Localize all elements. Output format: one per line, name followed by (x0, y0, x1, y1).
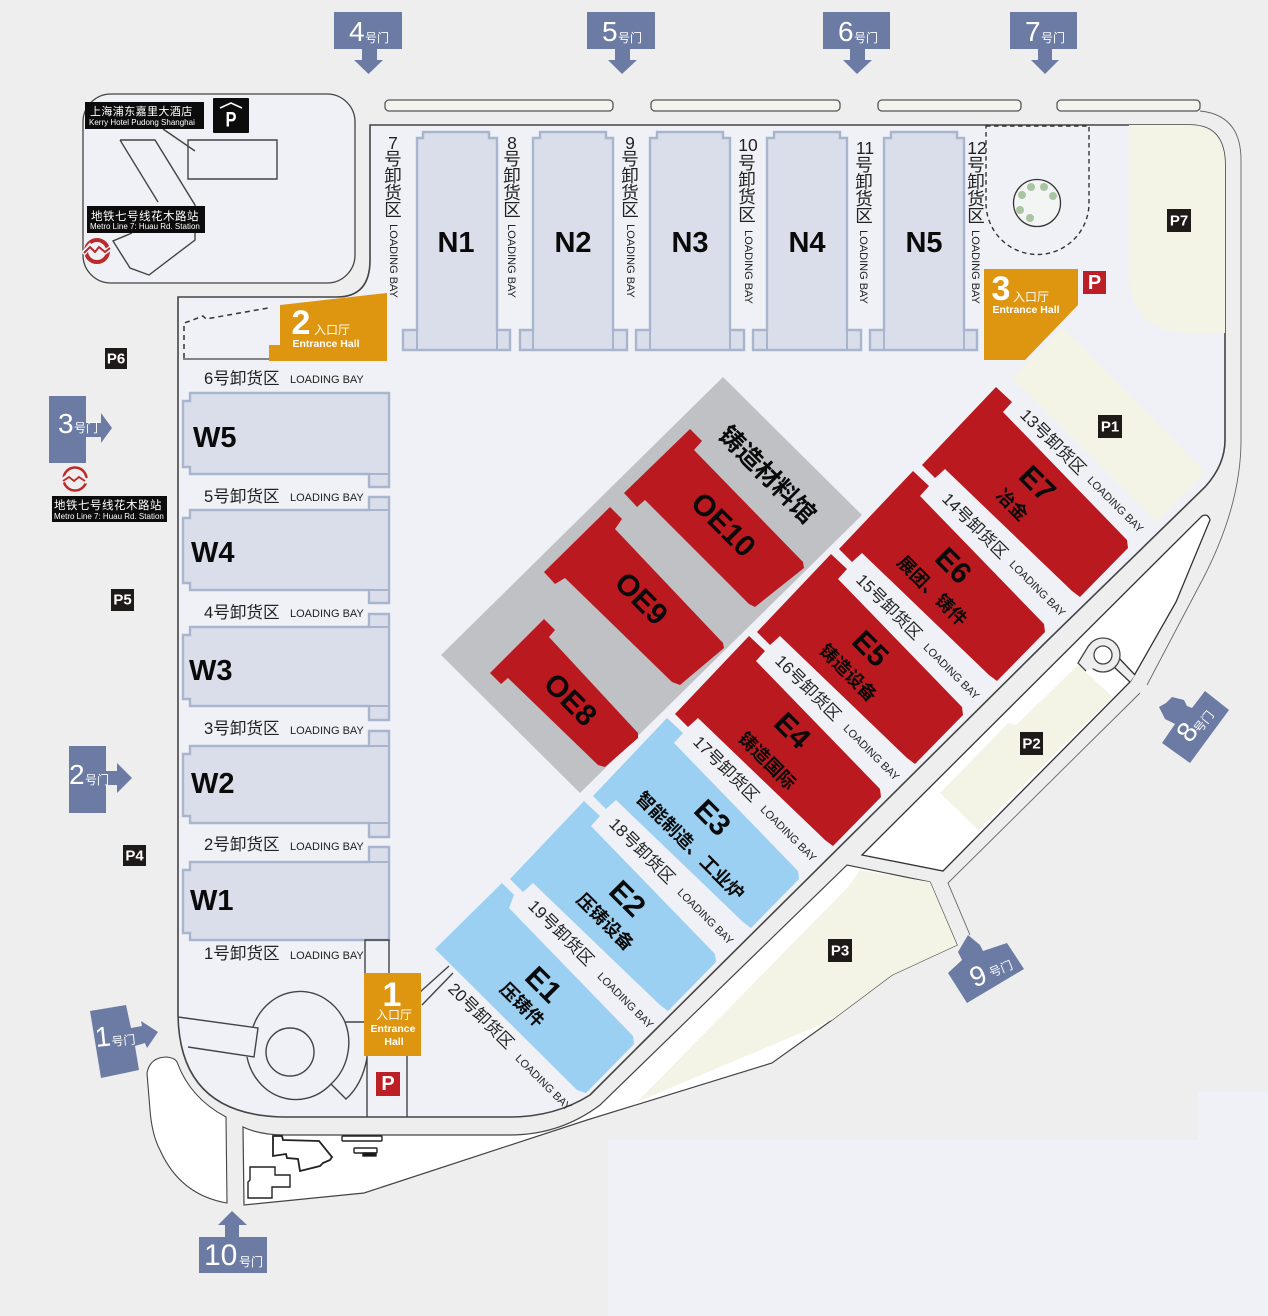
north loading bay labels: 卸 (621, 166, 639, 186)
gate 9: 号门 (987, 957, 1015, 980)
north loading bay labels: 10 (738, 135, 758, 155)
label: metro station: 地铁七号线花木路站 (91, 209, 199, 223)
gate 3: 号门 (74, 420, 98, 435)
gate 10 (199, 1211, 267, 1273)
east hall E7: LOADING BAY (1085, 475, 1146, 536)
label E1: 压铸件 (496, 979, 548, 1031)
north loading bay labels: 区 (855, 206, 873, 226)
label E5: LOADING BAY (921, 642, 982, 703)
north loading bay labels: LOADING BAY (742, 230, 754, 305)
entrance hall 1 (364, 973, 421, 1056)
metro station west (52, 468, 167, 522)
gate 8: 8 (1170, 716, 1204, 748)
panel: main exhibition site (178, 125, 1225, 1117)
north loading bay labels: 11 (856, 138, 874, 158)
hall N5 (870, 132, 977, 350)
gate 4: 号门 (365, 30, 389, 45)
north loading bay labels: 号 (384, 149, 402, 169)
east hall E7 (922, 387, 1146, 597)
hall OE8 (490, 619, 638, 767)
hall N1 (403, 132, 510, 350)
buildings (248, 1136, 382, 1198)
label E1: 19号卸货区 (524, 896, 598, 970)
gate 7 (1010, 12, 1077, 74)
west loading bay labels: LOADING BAY (290, 725, 364, 737)
hall OE9 (544, 507, 724, 685)
icon: parking (213, 98, 249, 133)
label: metro station: Metro Line 7: Huau Rd. Station (54, 512, 164, 521)
east hall E7: E7 (1012, 459, 1062, 509)
north loading bay labels: 区 (503, 200, 521, 220)
north loading bay labels: LOADING BAY (387, 224, 399, 299)
label E3: 17号卸货区 (689, 732, 763, 806)
label: metro station: 地铁七号线花木路站 (54, 498, 162, 512)
hall N1: N1 (437, 227, 475, 259)
parking tags (105, 209, 1191, 962)
hall OE8: OE8 (537, 667, 603, 733)
east hall E4 (675, 636, 881, 846)
north loading bay labels: 区 (621, 200, 639, 220)
east hall E3 (593, 718, 799, 928)
east hall E5 (757, 554, 963, 764)
label E4 (734, 651, 902, 794)
entrance hall 3: 3 (992, 270, 1010, 308)
label E1: LOADING BAY (513, 1053, 574, 1114)
north loading bay labels: 号 (855, 155, 873, 175)
hall N4: N4 (788, 227, 826, 259)
gate 6: 号门 (854, 30, 878, 45)
label: metro station: Metro Line 7: Huau Rd. Station (90, 222, 200, 231)
panel: foundry materials hall (441, 377, 862, 793)
hall W1: W1 (190, 885, 234, 917)
north loading bay labels: LOADING BAY (969, 230, 981, 305)
east hall E6 (839, 471, 1045, 681)
parking tags: P7 (1170, 212, 1188, 230)
label E3: LOADING BAY (758, 804, 819, 865)
gate 6 (823, 12, 890, 74)
label E5: E5 (845, 624, 895, 674)
gate 8 (1159, 691, 1229, 763)
label: Kerry Hotel: 上海浦东嘉里大酒店 (90, 104, 193, 118)
hall N2: N2 (554, 227, 592, 259)
west loading bay labels: 1号卸货区 (204, 944, 280, 963)
west loading bay labels: LOADING BAY (290, 492, 364, 504)
label E2: 压铸设备 (572, 889, 638, 955)
label E3: 智能制造、工业炉 (632, 787, 749, 904)
gate 5: 5 (602, 16, 618, 47)
north loading bay labels: 区 (967, 206, 985, 226)
entrance hall 2 (269, 293, 387, 361)
label E6: 14号卸货区 (938, 489, 1012, 563)
gate 1: 号门 (111, 1032, 136, 1049)
entrance hall 3 (984, 269, 1078, 360)
entrance hall 1: 1 (383, 976, 401, 1014)
hall N4 (753, 132, 861, 350)
north loading bay labels: 卸 (967, 172, 985, 192)
hall N3 (636, 132, 744, 350)
gate 5: 号门 (618, 30, 642, 45)
west loading bay labels: 2号卸货区 (204, 835, 280, 854)
label E4: E4 (767, 706, 817, 756)
label E5: 铸造设备 (815, 640, 881, 706)
hall N3: N3 (671, 227, 709, 259)
label E1: 20号卸货区 (444, 979, 518, 1053)
gate 7: 7 (1025, 16, 1041, 47)
west halls (183, 393, 389, 940)
hall W3: W3 (189, 655, 232, 687)
gate 1 (90, 1005, 158, 1078)
gate 2 (69, 746, 132, 813)
gate 2: 2 (69, 759, 85, 790)
dashed boundary near entrance 2 (184, 308, 268, 358)
east hall E7: 13号卸货区 (1016, 405, 1090, 479)
hall N5: N5 (905, 227, 943, 259)
label E3: E3 (687, 793, 737, 843)
north loading bay labels: 货 (621, 183, 639, 203)
label: metro station (87, 206, 205, 233)
gate 3 (49, 396, 112, 463)
garden roundabout (986, 126, 1089, 254)
north loading bay labels: 卸 (855, 172, 873, 192)
north loading bay labels: 货 (384, 183, 402, 203)
west loading bay labels (204, 369, 364, 963)
hall W2 (183, 731, 389, 837)
label E2: E2 (602, 874, 652, 924)
gate 7: 号门 (1041, 30, 1065, 45)
gate 3: 3 (58, 408, 74, 439)
north loading bay labels: LOADING BAY (857, 230, 869, 305)
parking tags: P5 (113, 592, 132, 608)
parking tags: P3 (831, 942, 849, 960)
hall W5: W5 (193, 422, 236, 454)
hall OE9: OE9 (608, 566, 674, 632)
label E6: E6 (928, 541, 978, 591)
hall OE10 (624, 429, 804, 607)
west loading bay labels: 3号卸货区 (204, 719, 280, 738)
entrance 1 surroundings (178, 940, 453, 1117)
north loading bay labels: 卸 (503, 166, 521, 186)
label E4: 铸造国际 (734, 728, 800, 794)
west loading bay labels: LOADING BAY (290, 950, 364, 962)
label: Kerry Hotel (85, 102, 204, 129)
north loading bay labels: 7 (388, 133, 398, 153)
gate 1: 1 (93, 1021, 112, 1053)
label E1: LOADING BAY (595, 971, 656, 1032)
north loading bay labels: 货 (967, 189, 985, 209)
parking area: P1 (1012, 327, 1205, 522)
label E5: 15号卸货区 (852, 570, 926, 644)
label E1 (444, 896, 656, 1114)
north loading bay labels (384, 133, 987, 305)
label: metro station (52, 496, 167, 522)
entrance hall 2: 入口厅 (314, 323, 350, 337)
gate 4: 4 (349, 16, 365, 47)
white south area with P3 (243, 865, 957, 1205)
red parking signs (376, 271, 1106, 1096)
west loading bay labels: 5号卸货区 (204, 487, 280, 506)
entrance hall 2: 2 (292, 304, 310, 342)
west loading bay labels: LOADING BAY (290, 841, 364, 853)
north loading bay labels: 卸 (738, 170, 756, 190)
north halls (403, 132, 977, 350)
entrance hall 1: 入口厅 (376, 1008, 412, 1022)
label E6: LOADING BAY (1007, 559, 1068, 620)
hall W3 (183, 614, 389, 720)
label E1: E1 (518, 960, 568, 1010)
label E6 (893, 489, 1068, 630)
west loading bay labels: 6号卸货区 (204, 369, 280, 388)
label E3 (632, 732, 819, 904)
gate 10: 10 (204, 1239, 237, 1272)
gate 2: 号门 (85, 772, 109, 787)
west loading bay labels: LOADING BAY (290, 608, 364, 620)
gate 10: 号门 (239, 1254, 263, 1269)
heading: foundry materials hall: 铸造材料馆 (713, 421, 821, 529)
icon: parking: P (226, 108, 236, 132)
gate 9: 9 (965, 959, 991, 993)
hall W4 (183, 497, 389, 603)
east hall E2 (510, 801, 716, 1011)
gate 5 (587, 12, 655, 74)
north loading bay labels: LOADING BAY (624, 224, 636, 299)
entrance hall 1: Hall (384, 1036, 404, 1048)
north loading bay labels: 号 (738, 153, 756, 173)
entrance hall 3: 入口厅 (1013, 290, 1049, 304)
gate 6: 6 (838, 16, 854, 47)
north loading bay labels: 12 (967, 138, 987, 158)
red parking signs: P (1088, 272, 1101, 294)
parking tags: P4 (125, 848, 144, 864)
icon: metro logo (83, 240, 112, 262)
north loading bay labels: 号 (621, 149, 639, 169)
north loading bay labels: 货 (855, 189, 873, 209)
north loading bay labels: 区 (738, 205, 756, 225)
label E4: 16号卸货区 (771, 651, 845, 725)
north loading bay labels: 区 (384, 200, 402, 220)
label E6: 展团、铸件 (893, 552, 971, 630)
north loading bay labels: 9 (625, 133, 635, 153)
panel: hotel and metro block (83, 94, 355, 283)
parking tags: P1 (1101, 418, 1119, 436)
white island with P2 (862, 515, 1210, 871)
label E4: LOADING BAY (841, 723, 902, 784)
label E2: 18号卸货区 (605, 814, 679, 888)
east hall E1 (435, 883, 634, 1093)
gate 9 (948, 935, 1024, 1003)
parking tags: P2 (1022, 736, 1041, 752)
hall W1 (183, 847, 389, 940)
entrance hall 3: Entrance Hall (992, 304, 1060, 316)
label E5 (815, 570, 982, 706)
north loading bay labels: 号 (503, 149, 521, 169)
north loading bay labels: 号 (967, 155, 985, 175)
entrance hall 1: Entrance (371, 1023, 416, 1035)
east hall E7: 冶金 (992, 484, 1033, 525)
hall N2 (520, 132, 627, 350)
outer road boundary (948, 111, 1241, 935)
red parking signs: P (381, 1073, 395, 1095)
label E2 (572, 814, 736, 955)
top road strips (385, 100, 1200, 111)
north loading bay labels: 卸 (384, 166, 402, 186)
gate 8: 号门 (1190, 708, 1217, 736)
hall OE10: OE10 (684, 486, 762, 564)
hall W2: W2 (191, 768, 234, 800)
north loading bay labels: 货 (738, 187, 756, 207)
north loading bay labels: 货 (503, 183, 521, 203)
west loading bay labels: 4号卸货区 (204, 603, 280, 622)
north loading bay labels: 8 (507, 133, 517, 153)
hall W4: W4 (191, 537, 234, 569)
entrance hall 2: Entrance Hall (292, 338, 360, 350)
parking tags: P6 (107, 350, 125, 368)
left island (147, 1057, 227, 1203)
label: Kerry Hotel: Kerry Hotel Pudong Shanghai (89, 118, 195, 127)
gate 4 (334, 12, 402, 74)
north loading bay labels: LOADING BAY (505, 224, 517, 299)
icon: metro logo (60, 468, 91, 490)
parking area: P7 (1129, 125, 1225, 333)
hall W5 (183, 393, 389, 487)
label E2: LOADING BAY (675, 887, 736, 948)
west loading bay labels: LOADING BAY (290, 374, 364, 386)
